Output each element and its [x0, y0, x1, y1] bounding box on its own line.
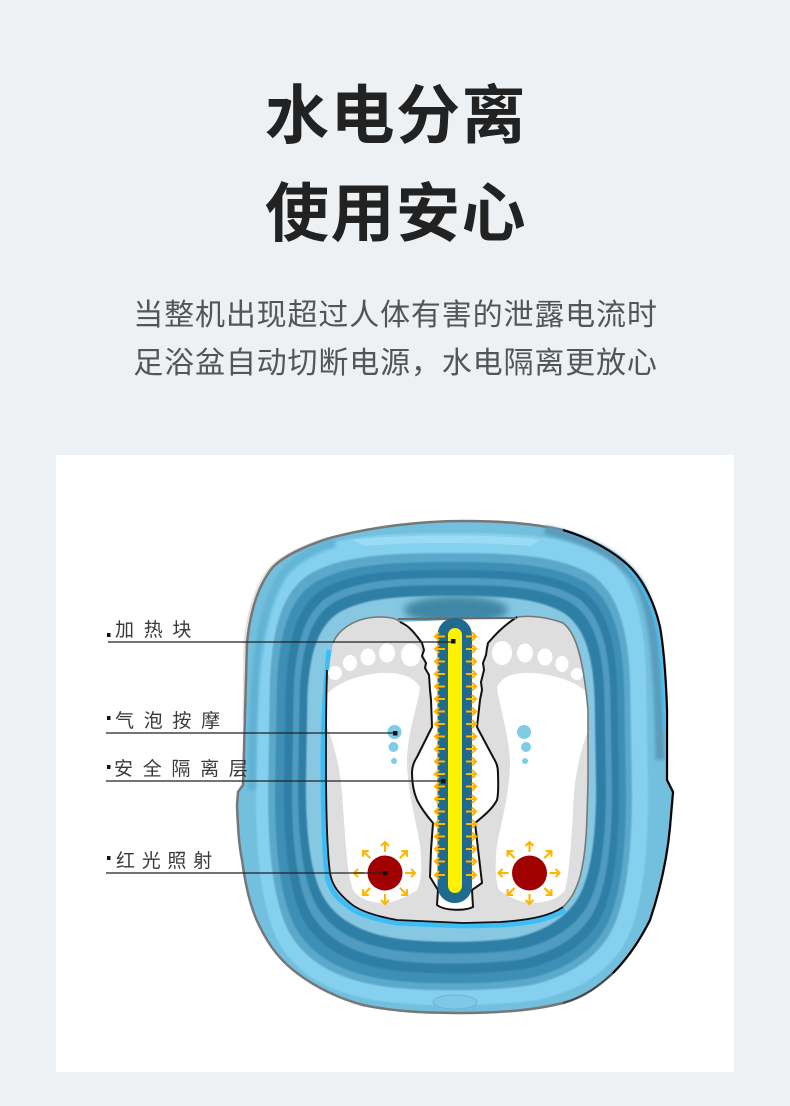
- isolation layer outline: [400, 617, 517, 910]
- callout: heating block: [107, 619, 456, 644]
- red light right: [498, 842, 560, 904]
- right edge black line: [563, 530, 673, 973]
- right edge bright blue line: [625, 565, 664, 730]
- window outline: [333, 617, 400, 643]
- rim top highlight: [352, 536, 540, 546]
- callout: red light: 红光照射: [116, 850, 219, 872]
- red light left: [354, 842, 415, 904]
- lower right dark edge: [563, 973, 613, 1003]
- bubbles right: [517, 725, 531, 764]
- gray floor: [326, 616, 588, 923]
- top right shaded edge: [545, 530, 660, 760]
- window left and bottom outline: [326, 670, 563, 923]
- title line 1: 水电分离: [265, 80, 527, 152]
- basin inner blue lip: [323, 650, 565, 926]
- inner top shadow patch: [404, 596, 508, 624]
- basin: [237, 521, 673, 1013]
- product diagram: [106, 520, 674, 1014]
- toes: [328, 641, 583, 680]
- basin outer rim: [237, 521, 673, 1013]
- heat arrows left: [435, 632, 445, 879]
- right footprint: [496, 673, 590, 903]
- heating block: [448, 628, 462, 893]
- left footprint: [326, 673, 421, 903]
- callout: bubble massage: [106, 710, 398, 736]
- description line 2: 足浴盆自动切断电源，水电隔离更放心: [133, 347, 658, 380]
- bubbles left: [388, 725, 402, 764]
- heat arrows right: [466, 632, 476, 879]
- ring bands: [256, 533, 648, 1005]
- callout: red light: [106, 850, 388, 876]
- panel: product diagram background: [56, 455, 734, 1072]
- bottom embossed oval: [433, 995, 477, 1009]
- isolation bar: [438, 618, 472, 903]
- heating bar: [435, 618, 476, 903]
- foot basin interior: [326, 616, 590, 923]
- callout: safety isolation layer: [106, 758, 446, 784]
- title line 2: 使用安心: [265, 178, 527, 250]
- top left shading: [252, 543, 335, 790]
- window right outline: [513, 616, 588, 907]
- top edge: [398, 618, 516, 619]
- basin outer halo: [244, 538, 328, 720]
- callout: safety isolation layer: 安全隔离层: [114, 758, 258, 780]
- description line 1: 当整机出现超过人体有害的泄露电流时: [133, 299, 658, 332]
- callout: bubble massage: 气泡按摩: [115, 710, 230, 732]
- callout: heating block: 加热块: [115, 619, 201, 641]
